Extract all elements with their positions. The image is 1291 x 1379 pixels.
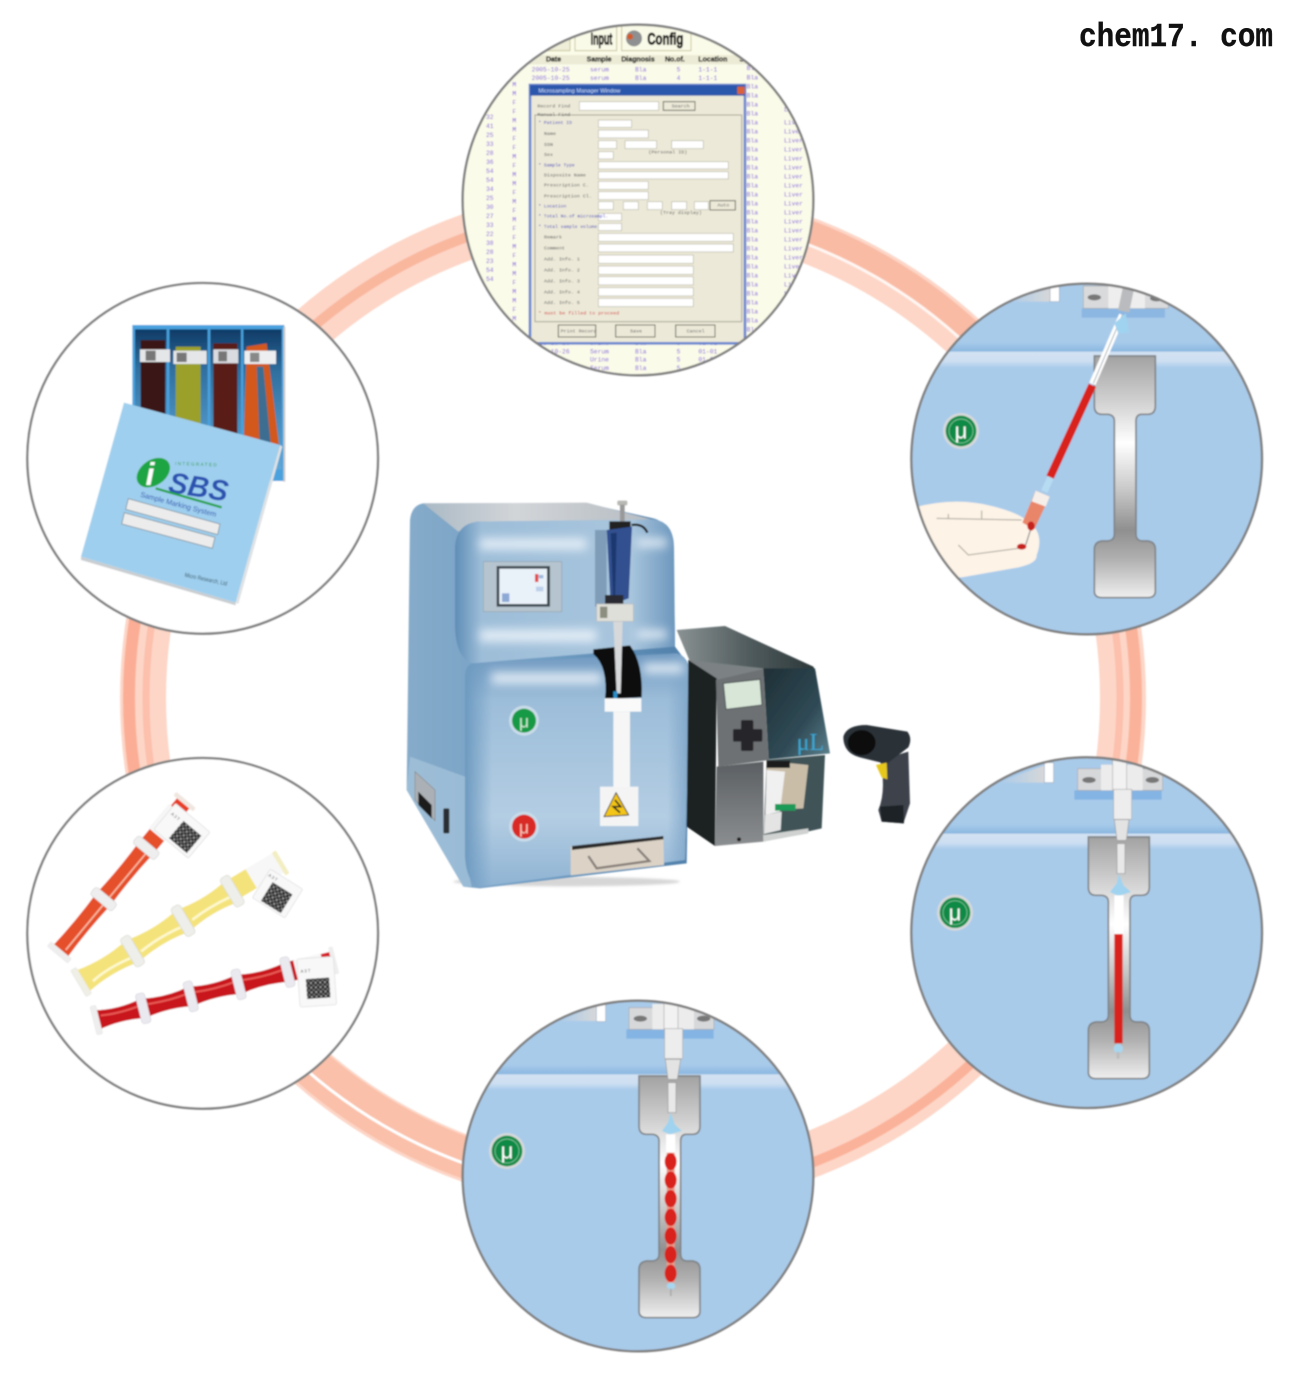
input dialog window: Print Record — [561, 329, 597, 335]
pipette tip — [1113, 759, 1132, 874]
dogbone slot — [1088, 837, 1149, 1079]
table rows: Bla — [747, 317, 758, 324]
input dialog window: Comment — [544, 245, 565, 251]
table rows: Urine — [590, 340, 609, 347]
input dialog window: Prescription Cl. — [544, 193, 592, 199]
table rows: Bla — [747, 272, 758, 279]
touch screen — [483, 562, 562, 612]
body highlights — [480, 538, 683, 684]
green status button — [509, 706, 539, 736]
table header: Location — [698, 57, 727, 64]
table rows: 28 — [486, 150, 494, 157]
table header — [520, 55, 760, 64]
input dialog window: * Total No.of microsampl. — [538, 213, 608, 219]
table rows: 54 — [486, 267, 494, 274]
table header: No.of. — [665, 57, 685, 64]
panel: labelled sample capillaries — [27, 758, 378, 1109]
table rows: Bla — [747, 173, 758, 180]
table rows: F — [512, 280, 516, 287]
table rows: Liver — [784, 281, 803, 288]
table rows: 22 — [486, 231, 494, 238]
table rows: Bla — [747, 164, 758, 171]
table rows: Liver — [784, 263, 803, 270]
table rows: Bla — [747, 281, 758, 288]
table rows: F — [512, 235, 516, 242]
table rows: M — [512, 154, 516, 161]
table rows: Bla — [747, 245, 758, 252]
table rows: 2005-10-25 — [532, 75, 570, 82]
input dialog window: Sex — [544, 152, 553, 158]
table rows: Liver — [784, 107, 803, 114]
table rows: 32 — [486, 114, 494, 121]
table rows: Bla — [747, 83, 758, 90]
iSBS logo — [131, 452, 231, 519]
table rows: Bla — [635, 365, 647, 372]
label printer — [677, 626, 830, 846]
machine surface band — [936, 762, 1238, 848]
table rows: M — [512, 172, 516, 179]
machine surface band — [940, 286, 1233, 366]
table rows: Liver — [784, 209, 803, 216]
capillary with blood — [1017, 284, 1135, 550]
panel: step capillary inserted in holder — [905, 757, 1272, 1108]
input dialog window: Search — [672, 104, 690, 110]
table rows: F — [512, 145, 516, 152]
table rows: 01-01 — [698, 340, 718, 347]
input dialog window — [530, 85, 745, 343]
input dialog window: Add. Info. 3 — [544, 279, 580, 285]
table rows: 27 — [486, 213, 494, 220]
table rows: Liver — [784, 227, 803, 234]
table rows: M — [512, 244, 516, 251]
input dialog window: Add. Info. 1 — [544, 257, 580, 263]
machine surface band — [488, 1004, 788, 1088]
table rows: Liver — [784, 146, 803, 153]
table rows: 33 — [486, 222, 494, 229]
input dialog window: Save — [630, 329, 642, 335]
yellow capillary label — [252, 869, 303, 918]
dark red capillary label — [297, 956, 337, 1007]
table rows: F — [512, 109, 516, 116]
table rows: Serum — [590, 365, 609, 372]
table rows: Bla — [747, 155, 758, 162]
table rows: 1-1-1 — [698, 67, 718, 74]
table rows: Bla — [747, 299, 758, 306]
table rows: Bla — [747, 263, 758, 270]
table rows: serum — [590, 75, 609, 82]
pipette tip — [664, 998, 683, 1113]
table rows: Bla — [747, 65, 758, 72]
table rows: Liver — [784, 200, 803, 207]
label strips — [122, 499, 220, 548]
panel: step sample segmented — [458, 998, 825, 1351]
table rows: Liver — [784, 191, 803, 198]
table rows: M — [512, 217, 516, 224]
input dialog window: Add. Info. 2 — [544, 268, 580, 274]
table rows: Bla — [747, 191, 758, 198]
input dialog window: Add. Info. 5 — [544, 300, 580, 306]
badge: green mu — [489, 1133, 525, 1169]
hand — [915, 502, 1039, 577]
holder block — [626, 1004, 714, 1039]
label printer: μL — [797, 730, 824, 756]
table rows: M — [512, 181, 516, 188]
capillary with blood droplets — [662, 1113, 682, 1296]
table rows: Bla — [747, 209, 758, 216]
input dialog window: Record Find — [537, 103, 570, 109]
waste drawer — [571, 836, 664, 875]
table rows: F — [512, 163, 516, 170]
input dialog window: * must be filled to proceed — [538, 311, 619, 317]
table rows: Liver — [784, 128, 803, 135]
input dialog window: * Location — [538, 203, 566, 209]
dogbone slot — [1094, 356, 1155, 598]
table rows: 25 — [486, 195, 494, 202]
table rows: Bla — [747, 146, 758, 153]
table rows: 54 — [486, 276, 494, 283]
table rows: Liver — [784, 254, 803, 261]
red status button — [509, 812, 539, 842]
table rows: M — [512, 91, 516, 98]
table rows: Liver — [784, 164, 803, 171]
badge: green mu: μ — [949, 900, 961, 925]
badge: green mu — [937, 895, 973, 931]
iSBS logo: INTEGRATED — [175, 461, 218, 467]
input dialog window: Microsampling Manager Window — [538, 89, 621, 95]
table rows: M — [512, 262, 516, 269]
table rows: Bla — [747, 74, 758, 81]
iSBS logo: SBS — [166, 466, 231, 508]
orange-red capillary label: A 3 T — [170, 811, 181, 822]
capillary with blood — [1110, 874, 1131, 1059]
panel: software input screen — [463, 20, 813, 375]
table rows: Liver — [784, 182, 803, 189]
dark red capillary label: A 3 T — [300, 968, 311, 974]
table rows: 54 — [486, 177, 494, 184]
table rows: Liver — [784, 236, 803, 243]
input dialog window: * Sample Type — [538, 163, 575, 169]
table rows: 23 — [486, 258, 494, 265]
barcode scanner — [843, 725, 910, 823]
table rows: Bla — [747, 92, 758, 99]
badge: green mu — [943, 413, 979, 449]
table rows: F — [512, 226, 516, 233]
input dialog window: Add. Info. 4 — [544, 289, 580, 295]
table rows: Bla — [747, 227, 758, 234]
table rows: M — [512, 82, 516, 89]
warning sticker — [604, 793, 629, 817]
panel: step collect sample with capillary — [905, 283, 1272, 634]
cartridge guide — [600, 622, 641, 826]
base shadow — [453, 877, 680, 886]
table rows: Bla — [635, 340, 647, 347]
open tray with capillaries — [132, 325, 285, 482]
table rows: F — [512, 307, 516, 314]
table header: Sample — [587, 57, 612, 64]
table rows: Bla — [747, 137, 758, 144]
input dialog window: (Personal ID) — [648, 149, 687, 155]
table rows: 28 — [486, 249, 494, 256]
table rows: 41 — [486, 123, 494, 130]
pipette — [595, 501, 647, 621]
table rows: M — [512, 127, 516, 134]
table header: S — [739, 57, 744, 64]
watermark: chem17. com — [1079, 19, 1273, 56]
dogbone slot — [639, 1076, 700, 1318]
input dialog window: Disposite Name — [544, 173, 586, 179]
software toolbar: Input — [591, 30, 613, 49]
yellow capillary label: A 3 T — [267, 873, 279, 882]
holder block — [1082, 283, 1168, 318]
iSBS logo: Sample Marking System — [139, 490, 217, 519]
panel: iSBS sample box — [27, 283, 378, 634]
table rows: Bla — [747, 218, 758, 225]
table header: Date — [546, 57, 561, 64]
instrument body — [407, 503, 690, 888]
input dialog window: Auto — [717, 203, 729, 209]
table rows: Liver — [784, 155, 803, 162]
table rows: F — [512, 190, 516, 197]
table rows: 5 — [677, 357, 681, 364]
input dialog window: Prescription C. — [544, 183, 589, 189]
table rows: Bla — [635, 75, 647, 82]
table rows: 54 — [486, 168, 494, 175]
table rows: M — [512, 298, 516, 305]
holder block — [1074, 765, 1163, 800]
table rows: M — [512, 316, 516, 323]
table rows: Bla — [747, 101, 758, 108]
table rows: Bla — [635, 348, 647, 355]
table rows — [486, 65, 803, 372]
table rows: serum — [590, 67, 609, 74]
table rows: M — [512, 289, 516, 296]
cover bottom edge shadow — [81, 557, 236, 605]
table rows: 33 — [486, 141, 494, 148]
red status button: μ — [519, 817, 529, 837]
input dialog window: * Patient ID — [538, 120, 572, 126]
table rows: M — [512, 199, 516, 206]
table rows: Liver — [784, 218, 803, 225]
table rows: 5 — [677, 67, 681, 74]
table rows: 34 — [486, 186, 494, 193]
table rows: Serum — [590, 348, 609, 355]
table rows: Bla — [747, 236, 758, 243]
green status button: μ — [519, 711, 529, 731]
centre instrument group — [407, 501, 910, 888]
software toolbar — [548, 26, 692, 52]
input dialog window: Cancel — [687, 329, 705, 335]
iSBS logo: i — [146, 456, 156, 492]
table rows: Bla — [747, 290, 758, 297]
table rows: Liver — [784, 173, 803, 180]
cover side edge — [236, 445, 282, 604]
badge: green mu: μ — [501, 1139, 513, 1164]
dark red capillary — [90, 945, 340, 1036]
box cover — [81, 403, 280, 603]
table rows: Bla — [747, 128, 758, 135]
table rows: 5 — [677, 348, 681, 355]
table rows: 2005-10-26 — [532, 340, 570, 347]
table rows: Bla — [747, 200, 758, 207]
table rows: 38 — [486, 240, 494, 247]
table rows: Bla — [747, 326, 758, 333]
table rows: Liver — [784, 119, 803, 126]
input dialog window: Name — [544, 131, 556, 137]
table rows: Urine — [590, 357, 609, 364]
table rows: 2005-10-26 — [532, 348, 570, 355]
table rows: Liver — [784, 137, 803, 144]
input dialog window: (Tray display) — [660, 210, 702, 216]
table rows: Bla — [747, 254, 758, 261]
table rows: 4 — [677, 75, 681, 82]
software toolbar: Config — [647, 30, 683, 49]
table rows: M — [512, 271, 516, 278]
table rows: 30 — [486, 204, 494, 211]
table rows: 5 — [677, 365, 681, 372]
table rows: Bla — [635, 357, 647, 364]
table rows: 01-01 — [698, 348, 718, 355]
input dialog window: Remark — [544, 235, 562, 241]
table header: Diagnosis — [621, 57, 655, 64]
table rows: 2005-10-25 — [532, 67, 570, 74]
table rows: M — [512, 118, 516, 125]
badge: green mu: μ — [955, 419, 967, 444]
table rows: Bla — [747, 110, 758, 117]
table rows: F — [512, 253, 516, 260]
table rows: 1-1-1 — [698, 75, 718, 82]
table rows: 25 — [486, 132, 494, 139]
table rows: 01-01 — [698, 357, 718, 364]
table rows: Bla — [635, 67, 647, 74]
input dialog window: * Total sample volume — [538, 224, 597, 230]
table rows: Liver — [784, 272, 803, 279]
black loading port — [593, 645, 642, 699]
orange-red capillary — [47, 791, 197, 964]
table rows: Liver — [784, 245, 803, 252]
table rows: 36 — [486, 159, 494, 166]
input dialog window: SSN — [544, 142, 553, 148]
table rows: 5 — [677, 340, 681, 347]
input dialog window: Manual Find — [537, 112, 570, 118]
table rows: F — [512, 100, 516, 107]
table rows: Bla — [747, 308, 758, 315]
table rows: F — [512, 208, 516, 215]
table rows: F — [512, 136, 516, 143]
orange-red capillary label — [154, 803, 210, 858]
table rows: Bla — [747, 182, 758, 189]
table rows: Bla — [747, 119, 758, 126]
yellow capillary — [70, 847, 291, 998]
side port — [415, 772, 449, 833]
maker credit: Micro Research, Ltd — [184, 573, 228, 588]
table rows: Liver — [784, 290, 803, 297]
